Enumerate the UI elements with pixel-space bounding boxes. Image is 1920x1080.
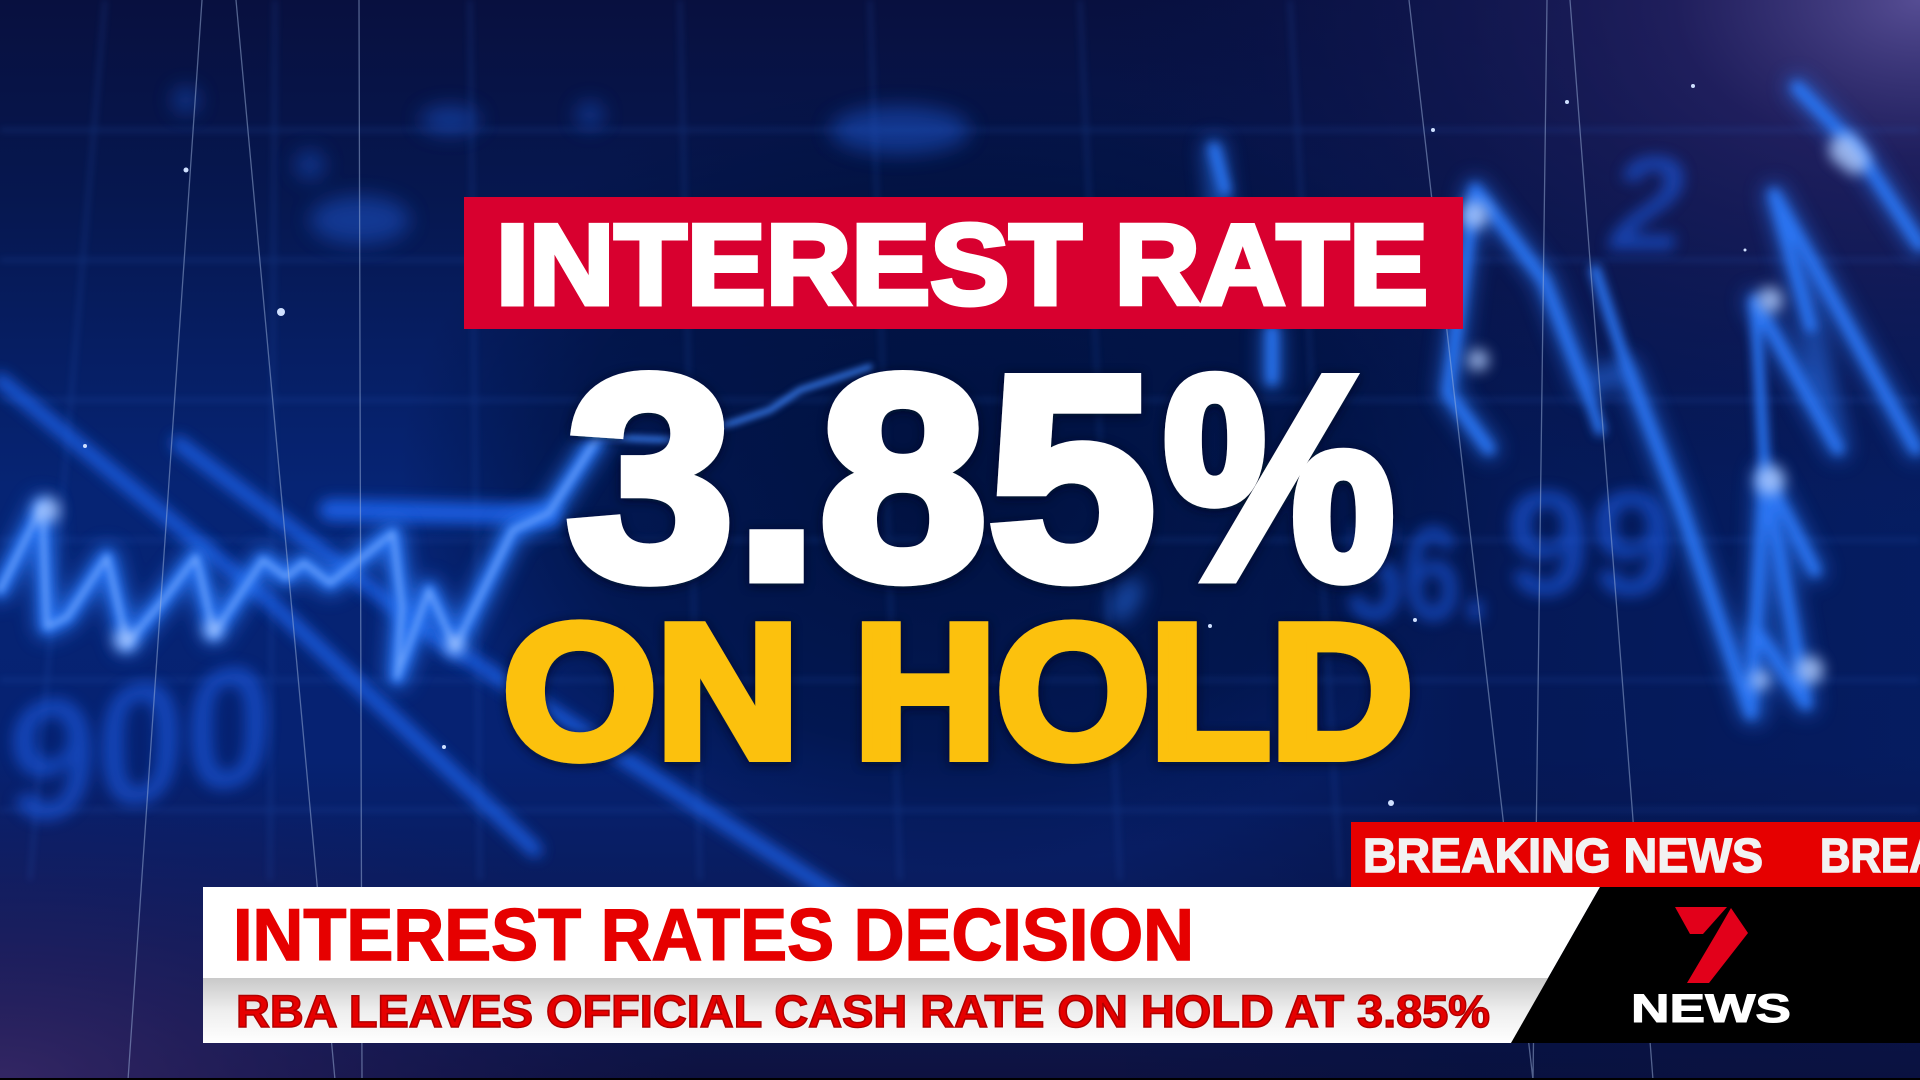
big number: 3.85%: 3.85 <box>566 316 1156 640</box>
big number: 3.85%: % <box>1163 316 1395 640</box>
big number: 3.85% <box>566 316 1395 640</box>
logo panel: 7 News <box>1511 887 1920 1043</box>
strap text: RBA LEAVES OFFICIAL CASH RATE ON HOLD AT 3.85% <box>236 986 1490 1037</box>
lower third: headline panel <box>203 887 1600 1043</box>
background: blurred financial chart: 56. <box>1345 498 1490 649</box>
background: blurred financial chart: 99 <box>1505 459 1675 627</box>
white headline band <box>203 887 1600 1043</box>
headline text: INTEREST RATES DECISION <box>233 895 1194 976</box>
breaking news ticker <box>1351 822 1920 887</box>
bottom frame edge <box>0 1078 1920 1080</box>
icon: 7 logo <box>1675 907 1748 983</box>
logo word: news: NEWS <box>1631 987 1791 1031</box>
background: blurred financial chart: 2 <box>1607 128 1685 279</box>
status: on hold: ON HOLD <box>503 586 1413 798</box>
grey gradient strap <box>203 978 1563 1043</box>
heading box: interest rate: INTEREST RATE <box>496 202 1428 329</box>
breaking news ticker: BREAKING NEWS <box>1363 830 1763 883</box>
